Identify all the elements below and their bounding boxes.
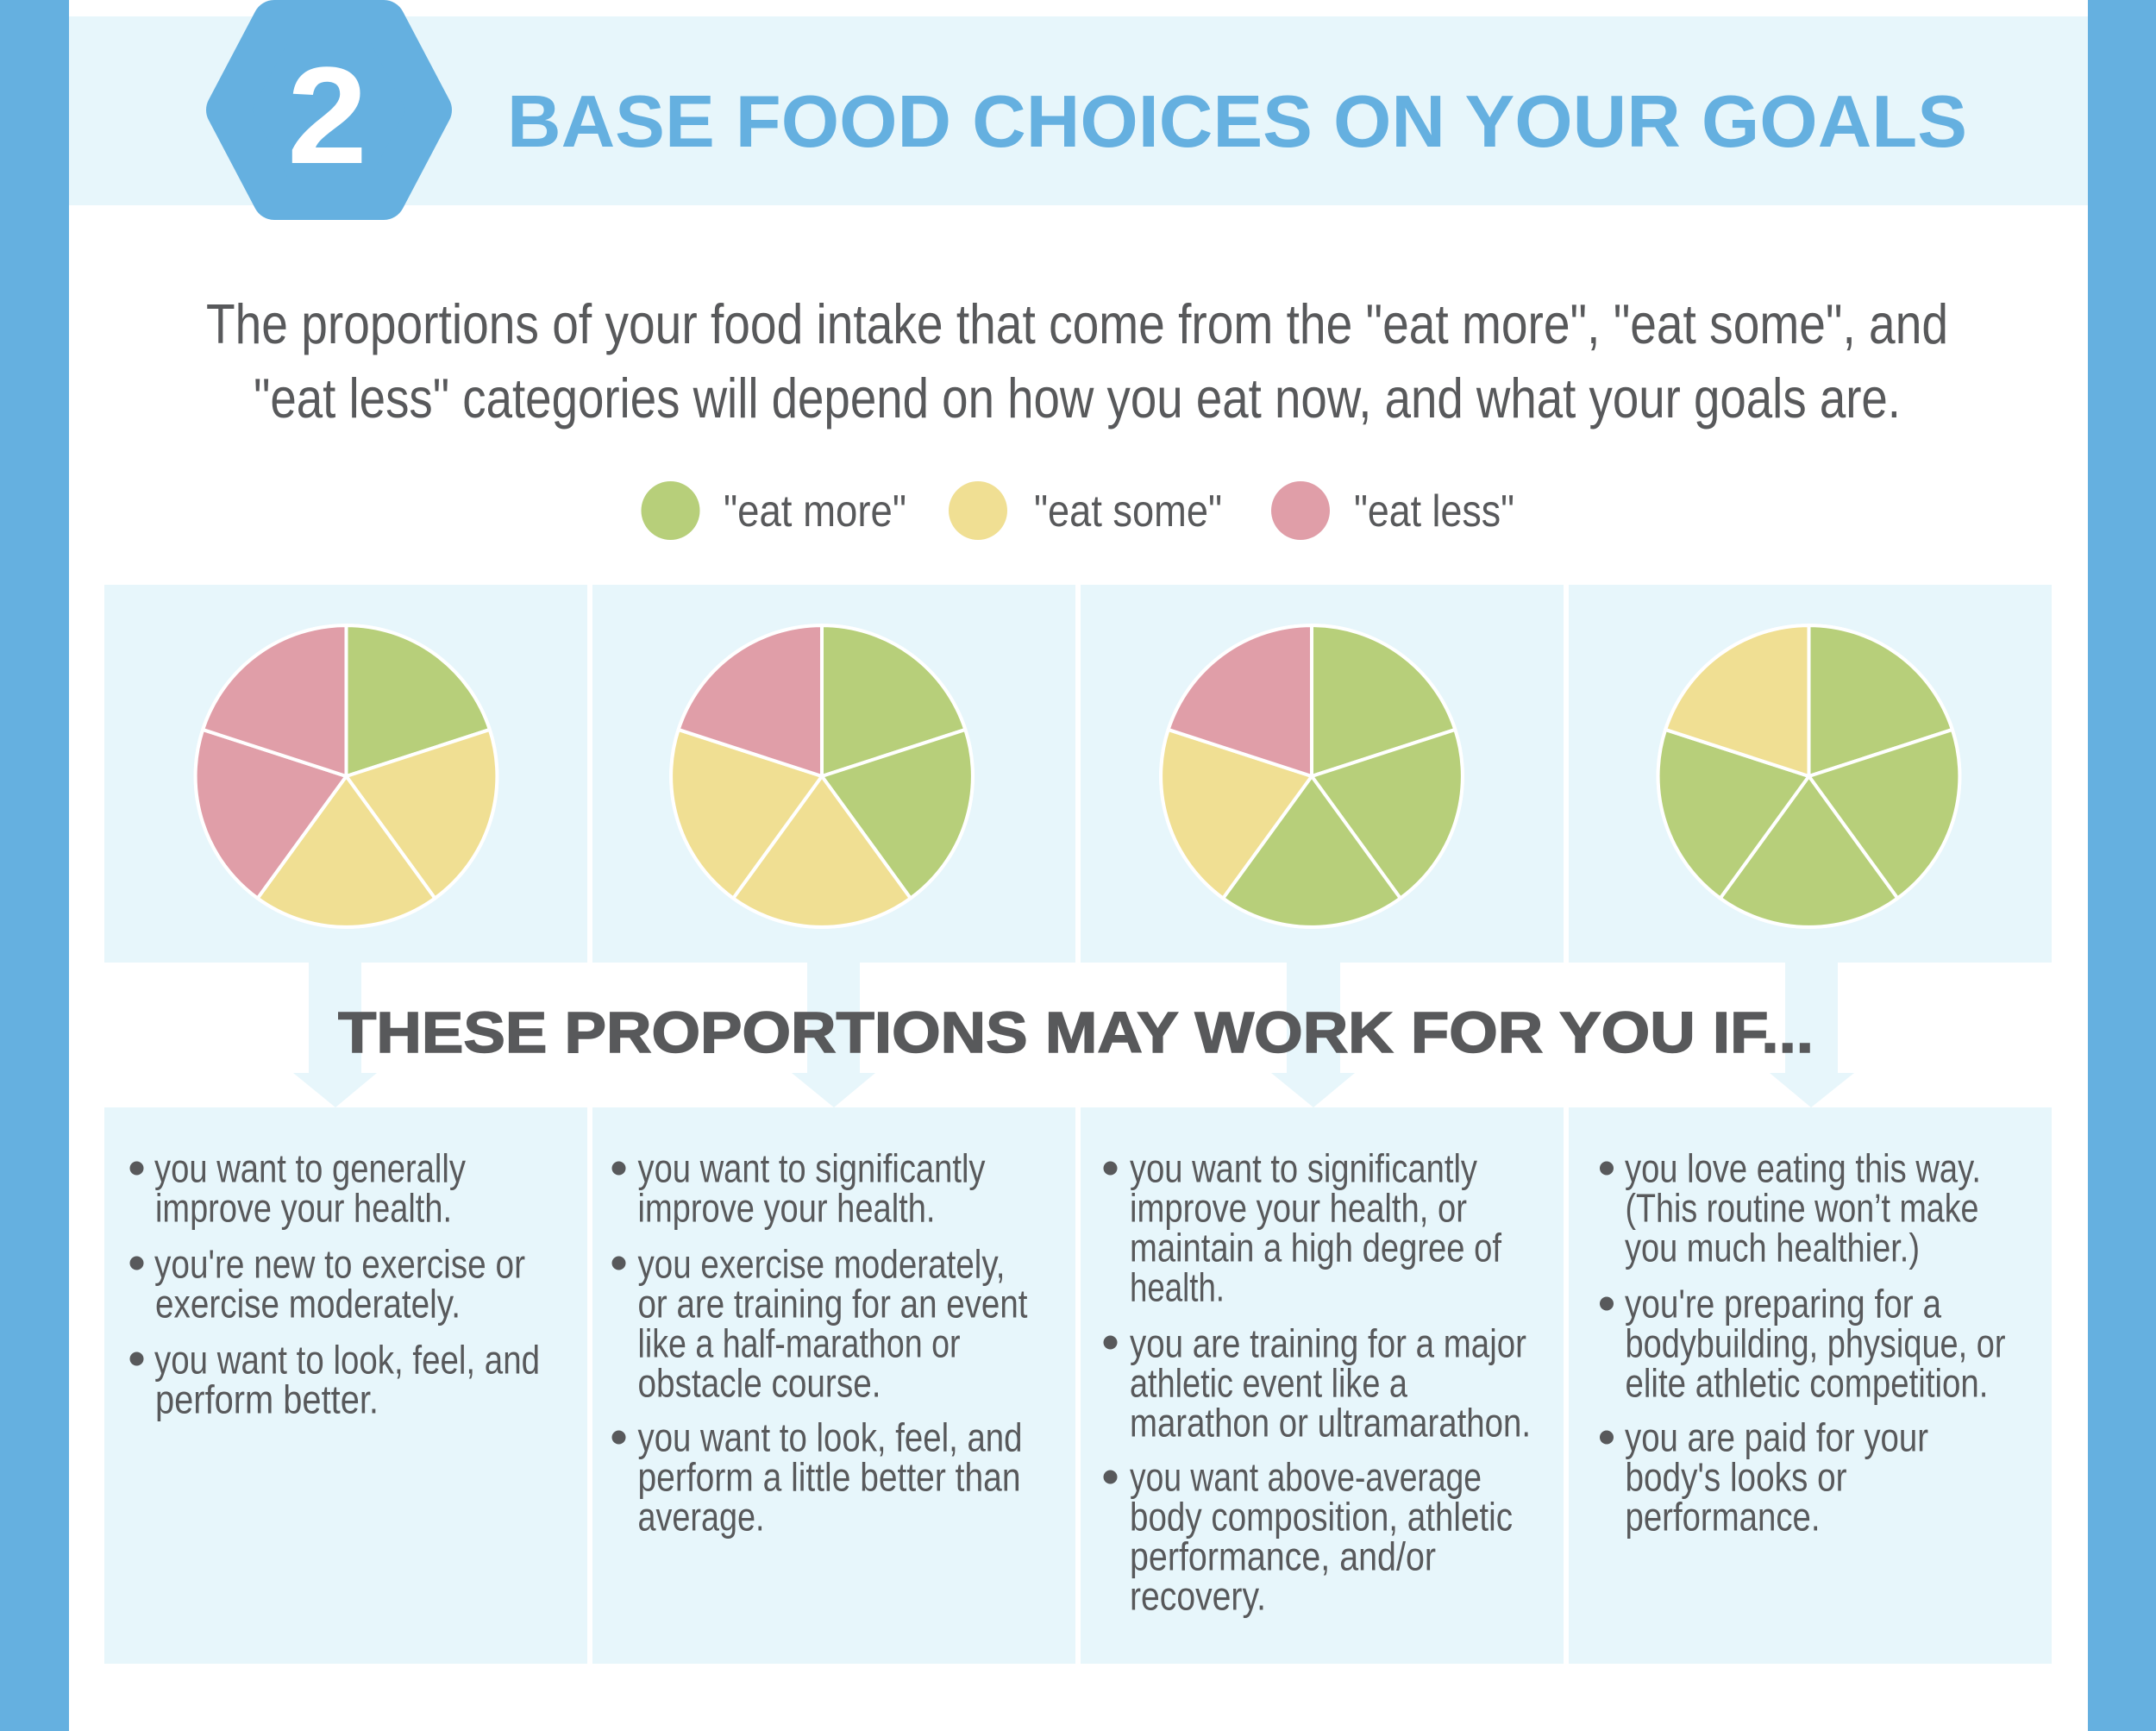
bullet list 4: elite athletic competition. [1625, 1361, 1989, 1406]
subheading: THESE PROPORTIONS MAY WORK FOR YOU IF... [338, 1000, 1814, 1065]
bullet list 4: you much healthier.) [1625, 1225, 1920, 1270]
arrow 2 [792, 963, 875, 1107]
panel: conditions 4 [1569, 1107, 2052, 1664]
icon: number hexagon: 2 [287, 38, 367, 192]
legend: eat less: "eat less" [1354, 486, 1514, 536]
bullet list 4: you're preparing for a [1625, 1282, 1941, 1326]
bullet list 2: like a half-marathon or [638, 1321, 961, 1366]
panel: pie 4 [1569, 585, 2052, 963]
bullet list 3: performance, and/or [1130, 1533, 1436, 1578]
intro text [206, 292, 1948, 430]
bullet list 1: perform better. [155, 1377, 379, 1421]
panel: conditions 2 [592, 1107, 1075, 1664]
icon: number hexagon [228, 22, 430, 198]
panel: pie 2 [592, 585, 1075, 963]
bullet list 3: you want to significantly [1130, 1145, 1477, 1190]
panel: conditions 1 [104, 1107, 587, 1664]
bullet list 3: health. [1130, 1264, 1225, 1309]
left side bar [0, 0, 69, 1731]
panel: conditions 3 [1081, 1107, 1564, 1664]
pie chart: 4 more, 1 some [1657, 624, 1961, 929]
bullet list 3: improve your health, or [1130, 1185, 1467, 1230]
right side bar [2088, 0, 2156, 1731]
legend: eat some [949, 481, 1222, 540]
bullet list 4: performance. [1625, 1494, 1820, 1539]
bullet list 3: you want above-average [1130, 1454, 1482, 1499]
bullet list 4: you are paid for your [1625, 1414, 1928, 1459]
bullet list 3: marathon or ultramarathon. [1130, 1401, 1531, 1446]
bullet list 3: you are training for a major [1130, 1321, 1526, 1366]
header band [69, 16, 2088, 205]
pie chart: 1 more, 2 some, 2 less [194, 624, 498, 929]
bullet list 2: improve your health. [638, 1185, 935, 1230]
arrow 3 [1271, 963, 1355, 1107]
panel: pie 1 [104, 585, 587, 963]
bullet list 1: improve your health. [155, 1185, 452, 1230]
legend: eat more [642, 481, 906, 540]
legend: eat some: "eat some" [1034, 486, 1222, 536]
bullet list 1: you're new to exercise or [154, 1242, 525, 1287]
bullet list 4: bodybuilding, physique, or [1625, 1321, 2006, 1366]
pie chart: 2 more, 2 some, 1 less [669, 624, 975, 929]
bullet list 2: you want to significantly [638, 1145, 985, 1190]
bullet list 1 [129, 1145, 540, 1421]
bullet list 4: (This routine won’t make [1625, 1185, 1978, 1230]
bullet list 3: maintain a high degree of [1130, 1225, 1501, 1270]
pie chart: 3 more, 1 some, 1 less [1159, 624, 1464, 929]
bullet list 1: exercise moderately. [155, 1282, 461, 1326]
bullet list 3: body composition, athletic [1130, 1494, 1513, 1539]
bullet list 2: perform a little better than [638, 1454, 1021, 1499]
arrow 1 [293, 963, 377, 1107]
legend [642, 481, 1514, 540]
bullet list 2: you exercise moderately, [638, 1242, 1006, 1287]
panel: pie 3 [1081, 585, 1564, 963]
bullet list 3: recovery. [1130, 1573, 1266, 1618]
bullet list 3 [1104, 1145, 1531, 1618]
bullet list 2: average. [638, 1494, 764, 1539]
bullet list 2: you want to look, feel, and [638, 1414, 1023, 1459]
bullet list 1: you want to look, feel, and [154, 1337, 540, 1382]
legend: eat less [1271, 481, 1514, 540]
bullet list 2: obstacle course. [638, 1361, 881, 1406]
title: BASE FOOD CHOICES ON YOUR GOALS [507, 81, 1967, 163]
arrow 4 [1770, 963, 1854, 1107]
bullet list 3: athletic event like a [1130, 1361, 1407, 1406]
intro text: "eat less" categories will depend on how you eat now, and what your goals are. [254, 367, 1901, 430]
bullet list 2: or are training for an event [638, 1282, 1028, 1326]
legend: eat more: "eat more" [724, 486, 906, 536]
bullet list 2 [612, 1145, 1028, 1539]
bullet list 1: you want to generally [154, 1145, 466, 1190]
bullet list 4: you love eating this way. [1625, 1145, 1981, 1190]
bullet list 4 [1600, 1145, 2006, 1539]
bullet list 4: body's looks or [1625, 1454, 1847, 1499]
